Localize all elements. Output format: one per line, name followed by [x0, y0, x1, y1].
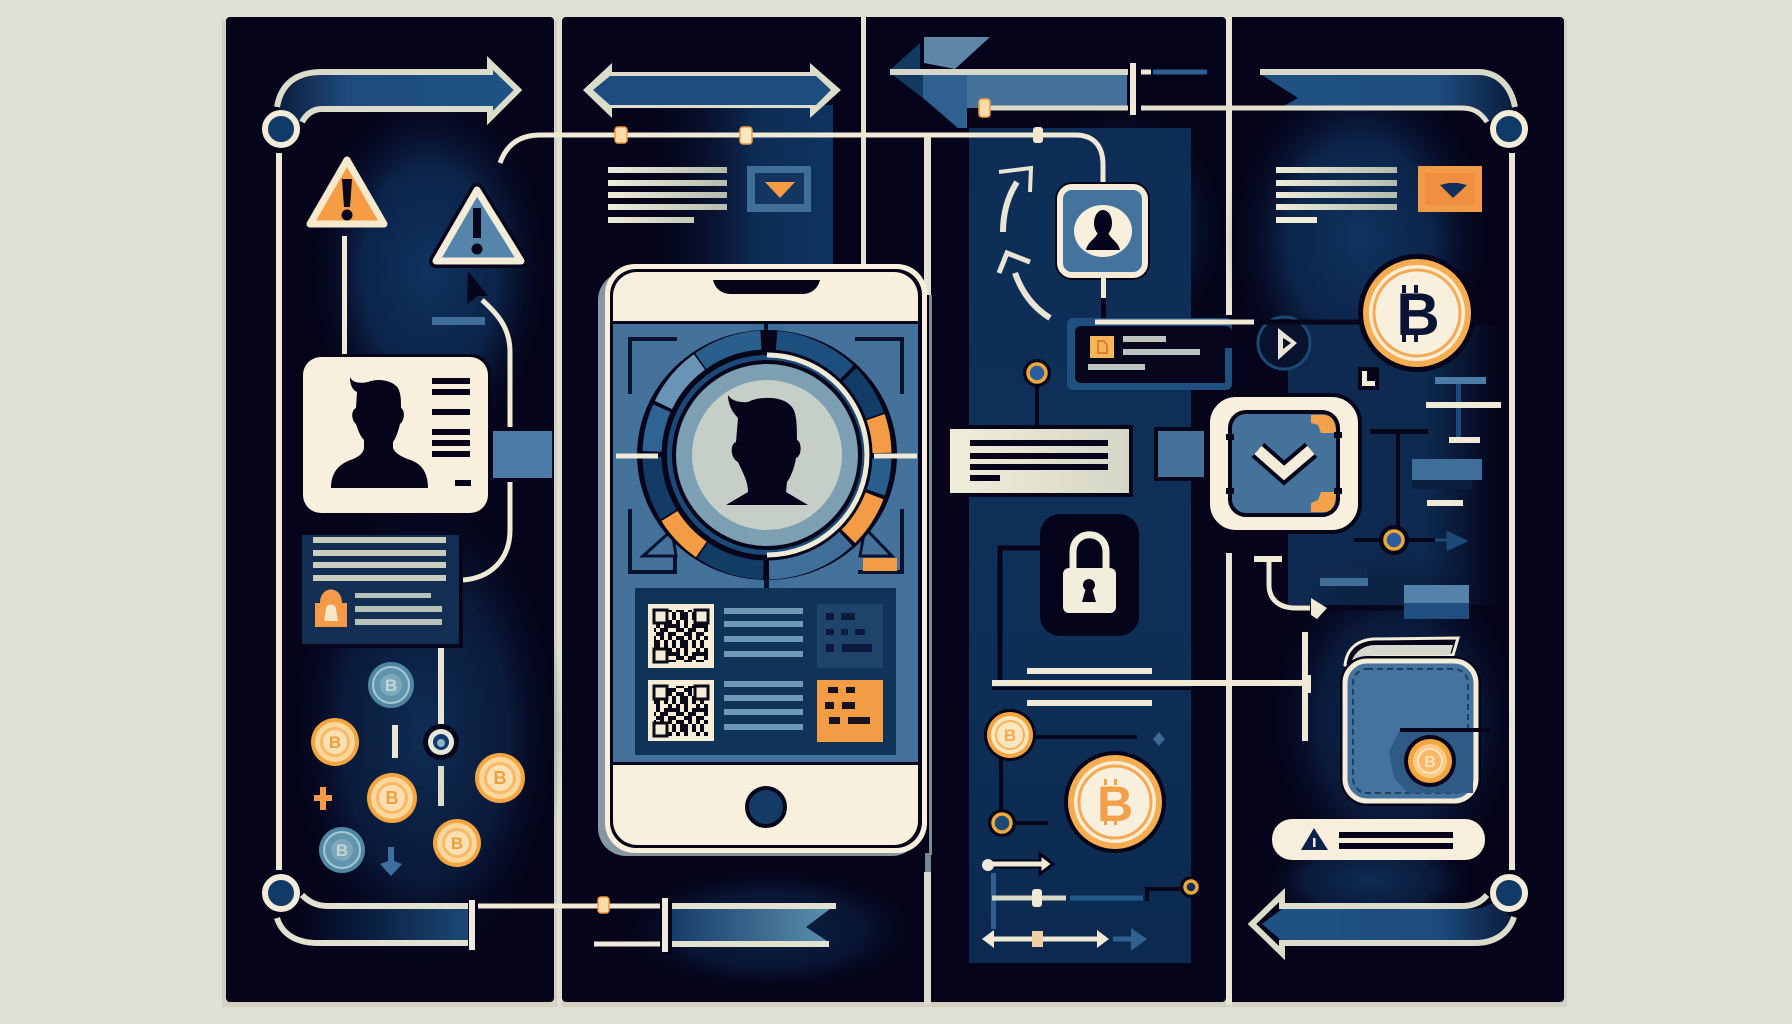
- corner brackets: [630, 339, 902, 572]
- coins: left cluster: [311, 662, 525, 873]
- icon: orange plus: [314, 787, 332, 810]
- coin: blue 1: B: [385, 676, 397, 695]
- connector: triangle to id card: [342, 236, 347, 358]
- connector: lock to line: [1000, 548, 1040, 680]
- phone screen: [604, 292, 930, 765]
- qr code 2: [648, 680, 714, 741]
- blue square: [1154, 427, 1208, 481]
- connector: dark lines around coins: [1001, 737, 1137, 823]
- connector: long top line: [500, 127, 1103, 186]
- check box inner: [1230, 412, 1338, 515]
- card: dark note: [1067, 318, 1254, 390]
- coin: bitcoin large orange: [1064, 751, 1166, 853]
- icon: small warning: [1301, 828, 1328, 850]
- text block: top right: [1276, 167, 1397, 223]
- id silhouette: [331, 377, 428, 488]
- side notches: [1226, 432, 1342, 494]
- coin: bitcoin large dark: [1255, 254, 1476, 372]
- node: bottom right: [1493, 877, 1525, 909]
- icon: orange box with navy marker: [1418, 166, 1482, 212]
- cursor arrow: [467, 271, 488, 304]
- coin: blue 2: [319, 827, 365, 873]
- rail: right vertical: [1509, 153, 1515, 870]
- qr code 1: [648, 604, 714, 668]
- warning triangle: blue: [436, 190, 521, 261]
- coin: orange 4: B: [451, 834, 463, 853]
- hook arrow: [1254, 559, 1405, 619]
- icon: corner mark: [1358, 367, 1379, 390]
- phone notch: [713, 280, 820, 294]
- panel: middle and right dark field: [562, 17, 1230, 1007]
- coin: bitcoin large orange: B: [1097, 776, 1133, 832]
- wallet coin: B: [1424, 754, 1436, 771]
- alert pill: [1272, 819, 1485, 860]
- phone: [598, 264, 930, 856]
- coin: blue 2: B: [336, 841, 348, 860]
- node: top right: [1493, 113, 1525, 145]
- orange corner top: [1311, 415, 1336, 433]
- lock text lines: [355, 593, 442, 625]
- wallet body: [1345, 661, 1476, 801]
- face circle: [676, 364, 858, 546]
- panel: left column: [222, 17, 565, 1007]
- coin: small orange: [984, 709, 1036, 761]
- icon: play circle: [1258, 317, 1310, 369]
- coin: small orange: B: [1004, 726, 1016, 745]
- blue block: [1404, 585, 1469, 619]
- orange key box: [817, 680, 883, 742]
- info panel: [635, 588, 896, 755]
- text lines: [313, 537, 446, 581]
- face silhouette: [726, 395, 808, 505]
- icon: diamond: [1153, 732, 1165, 746]
- connector: node rail: [392, 648, 459, 806]
- connector: node above text box: [1023, 359, 1051, 428]
- arrow banner: top middle: [583, 63, 841, 118]
- coin: orange 1: [311, 718, 359, 766]
- text lines and long line: [992, 632, 1311, 741]
- node: right ladder: [1354, 525, 1465, 555]
- icon: blue down arrow: [380, 847, 402, 876]
- note lines: [1088, 336, 1200, 370]
- arrow banner: top right: [1141, 72, 1515, 122]
- connector: curved line to warning: [463, 300, 510, 580]
- icon: lock: [1040, 514, 1139, 636]
- icon: navy box with orange marker: [747, 166, 811, 212]
- alert lines: [1339, 832, 1453, 849]
- arrow banner: bottom right: [1252, 895, 1514, 953]
- panel: right column: [1225, 17, 1567, 1007]
- wallet coin: [1404, 735, 1456, 787]
- warning triangle: orange: [310, 160, 384, 224]
- ring ticks: [616, 454, 917, 458]
- rail: left vertical: [276, 153, 282, 870]
- icon: check box: [1208, 395, 1360, 532]
- info lines: [724, 608, 803, 730]
- icon: orange lock: [315, 590, 347, 627]
- coin: orange 1: B: [329, 733, 341, 752]
- text box: cream: [946, 425, 1133, 497]
- orange corner bottom: [1311, 492, 1336, 512]
- id text lines: [432, 378, 471, 486]
- top tab: [748, 324, 784, 352]
- bottom tab: [748, 558, 785, 590]
- scan ring: [604, 292, 930, 618]
- coin: orange 4: [433, 819, 481, 867]
- icon: cycle arrows: [999, 168, 1050, 318]
- arrow: second small: [991, 873, 1202, 929]
- node: bottom left: [265, 877, 297, 909]
- blue tab: [489, 427, 553, 482]
- small blue bar: [1320, 567, 1368, 586]
- phone body: [605, 264, 927, 853]
- coin: orange 3: B: [494, 768, 506, 788]
- dark key box: [817, 604, 883, 668]
- arrow banner: top left: [277, 63, 518, 128]
- arrow: first small: [982, 854, 1053, 874]
- icon: orange doc: [1090, 336, 1114, 358]
- chevron: [1258, 450, 1311, 473]
- text panel with lock: [302, 535, 463, 648]
- coin: blue 1: [368, 662, 414, 708]
- arrow: double with tag: [982, 928, 1147, 951]
- icon: user badge: [1060, 187, 1145, 275]
- arrow banner: bottom left: [277, 895, 472, 943]
- arrow banner: bottom middle: [468, 895, 836, 955]
- connector: user to card: [1101, 276, 1106, 320]
- small bar: [432, 317, 485, 325]
- id card: [300, 354, 491, 516]
- phone shadow: [598, 272, 920, 856]
- node: top left: [265, 113, 297, 145]
- arrow shape: top of third panel: [890, 37, 1207, 128]
- coin: orange 2: [367, 773, 417, 823]
- wallet pages: [1345, 638, 1458, 668]
- icon: wallet: [1345, 638, 1490, 801]
- orange bar: [863, 558, 897, 571]
- coin: bitcoin large dark: B: [1396, 281, 1440, 348]
- text block: top middle: [608, 167, 727, 223]
- connector group: right ladder: [1370, 377, 1501, 527]
- coin: orange 3: [475, 753, 525, 803]
- wallet clasp: [1389, 730, 1473, 793]
- coin: orange 2: B: [386, 788, 398, 808]
- phone home button: [747, 788, 785, 826]
- node: orange ring: [988, 809, 1016, 837]
